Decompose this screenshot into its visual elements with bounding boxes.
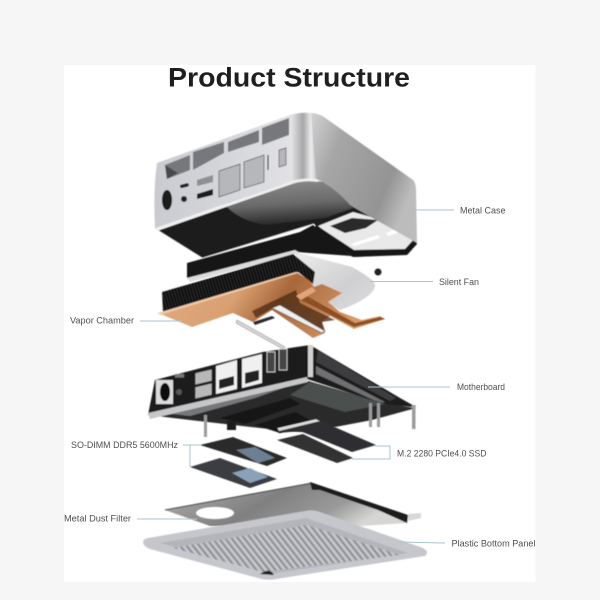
case front face	[154, 113, 316, 228]
plastic bottom panel	[143, 510, 427, 580]
fan screw	[374, 268, 382, 276]
USB-C and jack	[175, 374, 184, 378]
SSD upper	[277, 419, 376, 452]
label: Plastic Bottom Panel: Plastic Bottom Panel	[452, 538, 536, 548]
label: SO-DIMM DDR5: SO-DIMM DDR5 5600MHz	[71, 440, 178, 450]
heatsink fins	[162, 254, 315, 312]
SO-DIMM RAM modules	[190, 437, 287, 488]
label: Metal Case: Metal Case	[460, 206, 506, 216]
label: Metal Dust Filter: Metal Dust Filter	[64, 514, 131, 524]
vapor chamber copper plate	[158, 272, 385, 338]
label: Vapor Chamber: Vapor Chamber	[70, 316, 134, 326]
SSD lower	[277, 434, 353, 463]
USB ports	[267, 352, 275, 372]
ethernet ports	[216, 360, 237, 394]
RAM lower	[190, 458, 277, 488]
HDMI ports	[195, 369, 212, 385]
ventilation slots	[165, 118, 289, 179]
fan plate	[296, 252, 375, 310]
RAM upper	[200, 437, 287, 466]
label: Motherboard: Motherboard	[457, 382, 505, 392]
case base surface	[223, 180, 353, 225]
heat pipe highlights	[272, 305, 325, 333]
standoffs	[204, 403, 416, 437]
board top dark body	[148, 345, 416, 415]
filter tab	[408, 513, 421, 521]
board underside	[148, 380, 416, 432]
power inlet	[156, 380, 173, 404]
power socket and small ports	[162, 190, 172, 210]
label: M.2 SSD: M.2 2280 PCIe4.0 SSD	[397, 448, 487, 458]
white panel	[64, 65, 536, 582]
silent fan and heatsink	[158, 225, 385, 349]
board front edge	[148, 377, 308, 419]
filter hole	[196, 507, 234, 519]
label: Silent Fan: Silent Fan	[439, 277, 479, 287]
case interior	[155, 180, 417, 258]
M.2 SSD modules	[277, 419, 376, 463]
filter black edge	[310, 482, 408, 523]
metal dust filter	[165, 482, 421, 526]
top fin strip	[187, 225, 352, 278]
copper shadow	[252, 290, 335, 331]
motherboard	[148, 345, 416, 437]
title: Product Structure	[168, 62, 410, 92]
board post	[308, 345, 313, 377]
panel vent pattern	[173, 525, 400, 572]
panel inner rim	[160, 518, 408, 574]
case lower right opening	[318, 212, 414, 251]
metal case	[154, 113, 417, 258]
board right side stripes	[316, 350, 396, 401]
port cutouts	[219, 148, 286, 197]
case side wall	[310, 113, 417, 243]
callout lines	[137, 210, 454, 543]
